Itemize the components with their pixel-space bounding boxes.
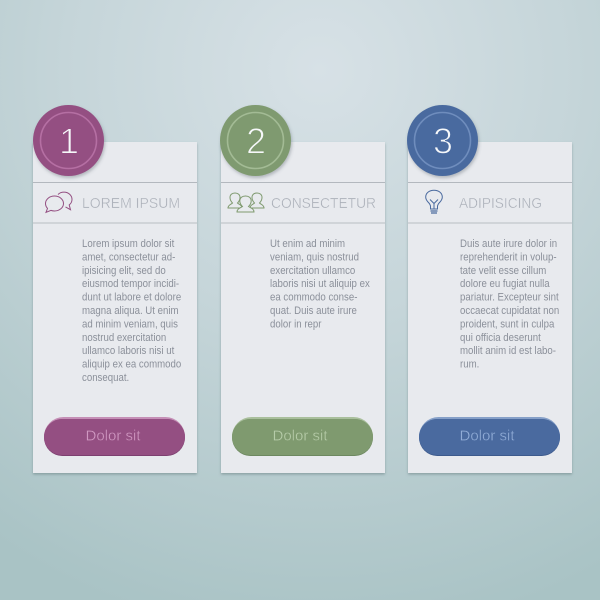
body text 2: dolor in repr bbox=[270, 318, 322, 331]
heading: consectetur: CONSECTETUR bbox=[271, 195, 376, 212]
number badge 2: 2 bbox=[246, 120, 266, 162]
body text 1: nostrud exercitation bbox=[82, 331, 166, 344]
body text 3: rum. bbox=[460, 358, 479, 371]
body text 1 bbox=[82, 237, 181, 384]
icon: people group bbox=[228, 193, 264, 212]
icon: light bulb bbox=[426, 190, 442, 213]
body text 3: occaecat cupidatat non bbox=[460, 304, 559, 317]
button 2 bbox=[232, 417, 373, 456]
body text 2: exercitation ullamco bbox=[270, 264, 355, 277]
body text 1: ipisicing elit, sed do bbox=[82, 264, 166, 277]
body text 3: mollit anim id est labo- bbox=[460, 344, 556, 357]
body text 1: eiusmod tempor incidi- bbox=[82, 277, 180, 290]
button 2: Dolor sit bbox=[272, 428, 328, 444]
body text 1: amet, consectetur ad- bbox=[82, 251, 176, 264]
body text 3: dolore eu fugiat nulla bbox=[460, 277, 550, 290]
body text 1: ad minim veniam, quis bbox=[82, 318, 178, 331]
icon: speech bubbles bbox=[46, 192, 72, 212]
body text 2 bbox=[270, 237, 370, 331]
card 2 sheet bbox=[221, 142, 385, 473]
card 1 sheet bbox=[33, 142, 197, 473]
body text 1: magna aliqua. Ut enim bbox=[82, 304, 179, 317]
body text 1: ullamco laboris nisi ut bbox=[82, 344, 174, 357]
body text 1: Lorem ipsum dolor sit bbox=[82, 237, 174, 250]
body text 1: consequat. bbox=[82, 371, 129, 384]
button 3 bbox=[419, 417, 560, 456]
number badge 3: 3 bbox=[433, 120, 453, 162]
card 3 sheet bbox=[408, 142, 572, 473]
body text 1: aliquip ex ea commodo bbox=[82, 358, 181, 371]
body text 3: tate velit esse cillum bbox=[460, 264, 546, 277]
number badge 1: 1 bbox=[59, 120, 79, 162]
body text 2: veniam, quis nostrud bbox=[270, 251, 359, 264]
body text 2: ea commodo conse- bbox=[270, 291, 358, 304]
button 3: Dolor sit bbox=[459, 428, 515, 444]
panel: card 3 adipisicing bbox=[407, 105, 572, 473]
body text 3: qui officia deserunt bbox=[460, 331, 541, 344]
heading: adipisicing: ADIPISICING bbox=[459, 195, 542, 212]
body text 2: quat. Duis aute irure bbox=[270, 304, 357, 317]
panel: card 1 lorem ipsum bbox=[33, 105, 197, 473]
heading: lorem ipsum: LOREM IPSUM bbox=[82, 195, 180, 212]
body text 1: dunt ut labore et dolore bbox=[82, 291, 181, 304]
body text 3: Duis aute irure dolor in bbox=[460, 237, 557, 250]
body text 2: Ut enim ad minim bbox=[270, 237, 345, 250]
body text 3: proident, sunt in culpa bbox=[460, 318, 555, 331]
button 1: Dolor sit bbox=[85, 428, 141, 444]
number badge 2 bbox=[220, 105, 291, 176]
number badge 1 bbox=[33, 105, 104, 176]
number badge 3 bbox=[407, 105, 478, 176]
body text 3: pariatur. Excepteur sint bbox=[460, 291, 559, 304]
body text 3: reprehenderit in volup- bbox=[460, 251, 557, 264]
body text 3 bbox=[460, 237, 559, 371]
body text 2: laboris nisi ut aliquip ex bbox=[270, 277, 370, 290]
button 1 bbox=[44, 417, 185, 456]
panel: card 2 consectetur bbox=[220, 105, 385, 473]
